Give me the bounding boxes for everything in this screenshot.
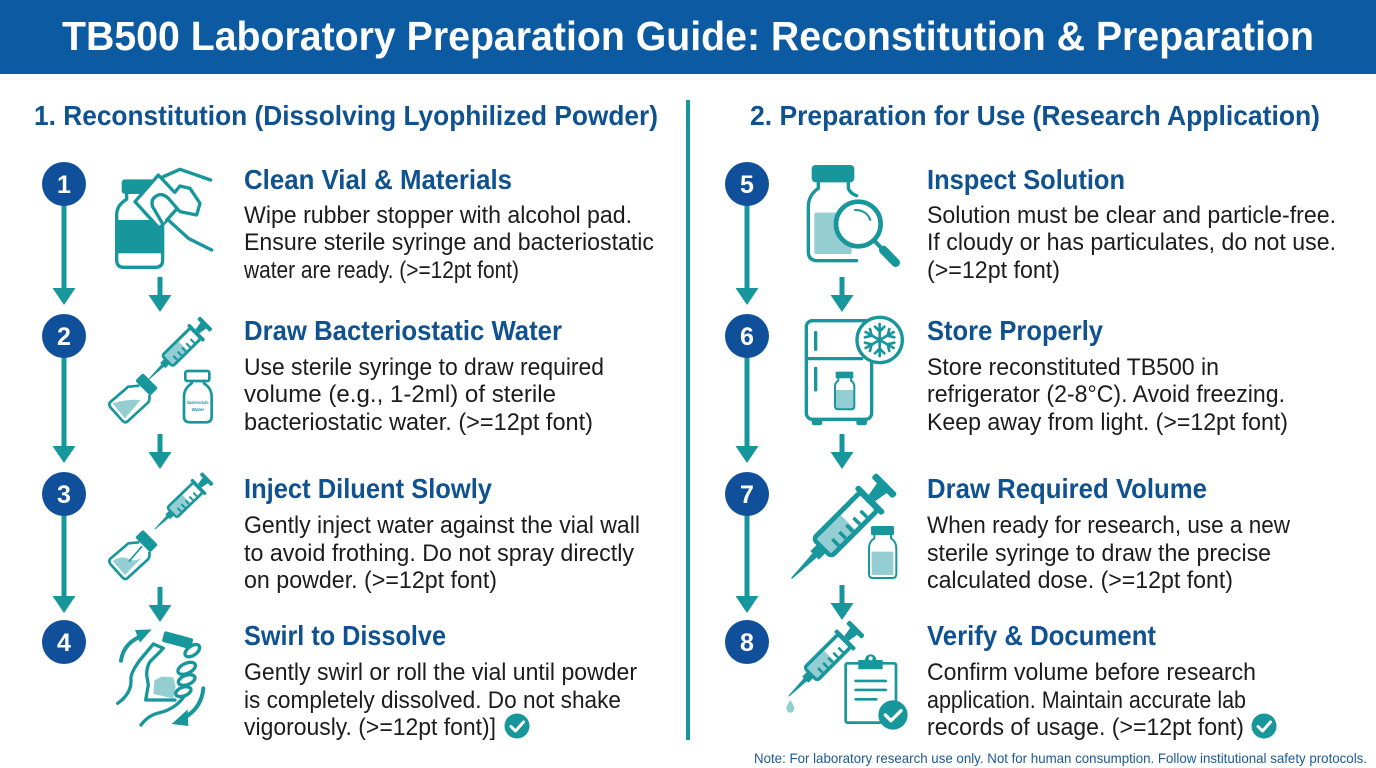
step 2 text: volume (e.g., 1-2ml) of sterile	[244, 381, 556, 408]
step 4 text with check: is completely dissolved. Do not shake	[244, 687, 621, 714]
icon: vial with magnifying glass	[808, 165, 896, 263]
step 7 number badge: 7	[740, 481, 754, 509]
step 1 number badge	[42, 162, 86, 206]
step 5 number badge: 5	[740, 171, 754, 199]
icon arrow: 2 to 3	[148, 434, 172, 469]
step 4 number badge	[42, 620, 86, 664]
step 6 number badge: 6	[740, 323, 754, 351]
step 8 number badge	[725, 620, 769, 664]
step 7 text: Draw Required Volume	[927, 473, 1207, 504]
step 2 number badge	[42, 314, 86, 358]
step 2 number badge: 2	[57, 323, 71, 351]
icon: syringe drawing water from vial	[109, 315, 214, 422]
icon arrow: 6 to 7	[830, 434, 854, 469]
title banner	[0, 0, 1376, 74]
step 7 number badge	[725, 472, 769, 516]
arrow: step 5 to 6	[736, 204, 758, 305]
step 5 text: Solution must be clear and particle-free.	[927, 202, 1336, 229]
step 5 text: Inspect Solution	[927, 164, 1125, 195]
step 2 text: Use sterile syringe to draw required	[244, 354, 604, 381]
step 4 text with check: vigorously. (>=12pt font)]	[244, 714, 496, 741]
step 3 text	[244, 473, 640, 594]
step 5 text	[927, 164, 1336, 284]
icon: syringe droplet and clipboard	[779, 618, 908, 730]
icon arrow: 5 to 6	[830, 277, 854, 312]
icon: hand swirling vial	[118, 629, 203, 726]
step 6 text: refrigerator (2-8°C). Avoid freezing.	[927, 381, 1285, 408]
column divider	[686, 100, 690, 740]
step 6 number badge	[725, 314, 769, 358]
step 6 text	[927, 315, 1288, 436]
step 8 text with check	[927, 620, 1276, 741]
step 5 number badge	[725, 162, 769, 206]
icon: wiping vial with alcohol pad	[117, 169, 212, 267]
arrow: step 6 to 7	[736, 356, 758, 463]
icon: syringe and vial	[779, 470, 900, 591]
step 5 text: If cloudy or has particulates, do not use.	[927, 229, 1336, 256]
step 7 text: When ready for research, use a new	[927, 512, 1291, 539]
step 6 text: Store Properly	[927, 315, 1103, 346]
step 7 text: calculated dose. (>=12pt font)	[927, 567, 1233, 594]
icon arrow: 3 to 4	[148, 587, 172, 622]
icon arrow: 7 to 8	[830, 585, 854, 620]
icon: syringe drawing water from vial: Bacteriostatic	[187, 400, 209, 406]
step 8 text with check: Confirm volume before research	[927, 659, 1256, 686]
step 5 text: (>=12pt font)	[927, 257, 1060, 284]
icon: injecting diluent into vial	[109, 470, 215, 579]
step 2 text	[244, 315, 604, 436]
step 1 text: Wipe rubber stopper with alcohol pad.	[244, 202, 632, 229]
icon arrow: 1 to 2	[148, 277, 172, 312]
step 8 text with check: Verify & Document	[927, 620, 1156, 651]
title banner: TB500 Laboratory Preparation Guide: Reconstitution & Preparation	[62, 13, 1314, 59]
step 3 text: Inject Diluent Slowly	[244, 473, 492, 504]
step 8 number badge: 8	[740, 629, 754, 657]
step 4 text with check	[244, 620, 637, 741]
arrow: step 7 to 8	[736, 514, 758, 613]
icon: syringe drawing water from vial: Water	[192, 407, 204, 413]
step 4 number badge: 4	[57, 629, 71, 657]
step 3 text: Gently inject water against the vial wall	[244, 512, 640, 539]
step 3 number badge	[42, 472, 86, 516]
section heading: preparation for use: 2. Preparation for Use (Research Application)	[750, 100, 1320, 131]
section heading: reconstitution: 1. Reconstitution (Dissolving Lyophilized Powder)	[34, 100, 658, 131]
step 6 text: Store reconstituted TB500 in	[927, 354, 1219, 381]
step 8 text with check: records of usage. (>=12pt font)	[927, 714, 1244, 741]
step 3 number badge: 3	[57, 481, 71, 509]
arrow: step 2 to 3	[52, 356, 76, 463]
step 4 text with check: Swirl to Dissolve	[244, 620, 446, 651]
step 4 text with check: Gently swirl or roll the vial until powder	[244, 659, 637, 686]
step 1 number badge: 1	[57, 171, 71, 199]
step 1 text	[243, 164, 654, 284]
step 1 text: water are ready. (>=12pt font)	[243, 257, 519, 284]
step 1 text: Ensure sterile syringe and bacteriostatic	[244, 229, 654, 256]
step 3 text: to avoid frothing. Do not spray directly	[244, 540, 634, 567]
step 2 text: bacteriostatic water. (>=12pt font)	[244, 409, 593, 436]
step 2 text: Draw Bacteriostatic Water	[244, 315, 562, 346]
icon: refrigerator with snowflake and vial	[806, 317, 902, 425]
step 7 text	[927, 473, 1291, 594]
arrow: step 3 to 4	[52, 514, 76, 613]
step 6 text: Keep away from light. (>=12pt font)	[927, 409, 1288, 436]
arrow: step 1 to 2	[52, 204, 76, 305]
step 8 text with check: application. Maintain accurate lab	[927, 687, 1246, 714]
step 3 text: on powder. (>=12pt font)	[244, 567, 497, 594]
step 1 text: Clean Vial & Materials	[244, 164, 512, 195]
step 7 text: sterile syringe to draw the precise	[927, 540, 1271, 567]
